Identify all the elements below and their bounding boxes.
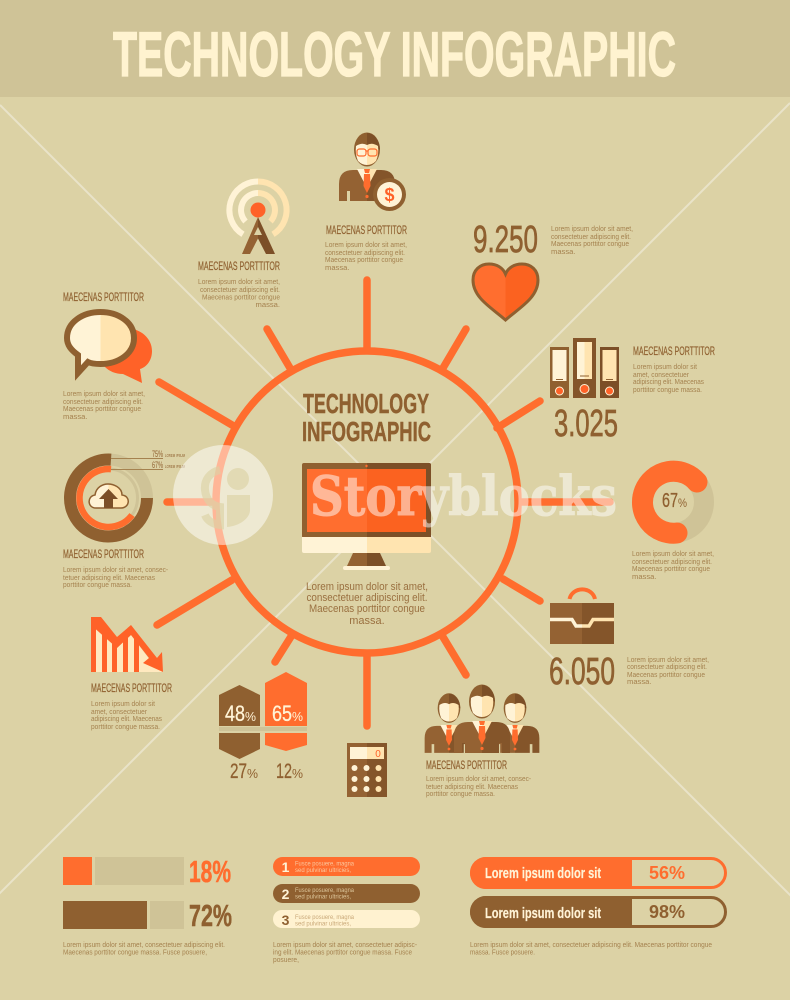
stat: 9.250: 9.250 <box>473 219 538 261</box>
hexagon comparison chart: % <box>245 709 256 724</box>
cloud <box>89 484 128 508</box>
bottom panel: numbered pills: sed pulvinar ultricies, <box>295 894 351 900</box>
binders caption: porttitor congue massa. <box>633 385 702 394</box>
diagonal background lines <box>0 103 790 900</box>
stat text: consectetuer adipiscing elit. <box>551 232 631 241</box>
stat text <box>551 224 633 256</box>
bars caption <box>63 940 225 956</box>
donut chart: 67% <box>642 471 704 533</box>
hexagon comparison chart: 48 <box>225 701 245 726</box>
central heading <box>302 388 431 447</box>
progress pills caption: massa. Fusce posuere. <box>470 948 535 956</box>
progress labels: LOREM IPSUM <box>165 464 185 469</box>
hexagon comparison chart: % <box>247 766 258 781</box>
glasses <box>357 149 377 156</box>
falling chart caption: adipiscing elit. Maecenas <box>91 714 162 723</box>
briefcase caption <box>627 655 709 686</box>
icon: calculator <box>347 743 387 797</box>
antenna caption: Lorem ipsum dolor sit amet, <box>198 277 280 286</box>
businessman caption: Lorem ipsum dolor sit amet, <box>325 240 407 249</box>
team caption: porttitor congue massa. <box>426 789 495 798</box>
stat text: Maecenas porttitor congue <box>551 239 629 248</box>
progress labels: 67% <box>152 460 163 470</box>
central heading: INFOGRAPHIC <box>302 416 431 447</box>
businessman caption <box>325 225 407 272</box>
central text block: Lorem ipsum dolor sit amet, <box>306 581 428 593</box>
bottom panel: progress pills: 56% <box>649 863 685 883</box>
businessman caption: Maecenas porttitor congue <box>325 255 403 264</box>
icon: briefcase <box>550 589 614 644</box>
central ring with spokes <box>157 280 610 726</box>
speech caption <box>63 389 145 421</box>
icon: speech bubbles <box>67 312 152 383</box>
stat text: massa. <box>551 247 575 256</box>
falling chart caption: amet, consectetuer <box>91 707 147 716</box>
binders caption: Lorem ipsum dolor sit <box>633 362 698 371</box>
progress labels: LOREM IPSUM <box>165 453 185 458</box>
bottom panel: numbered pills: Fusce posuere, magna <box>295 860 354 868</box>
falling chart caption <box>91 683 172 731</box>
radial progress caption <box>63 549 168 589</box>
icon: heart <box>473 264 538 320</box>
stat text: Lorem ipsum dolor sit amet, <box>551 224 633 233</box>
bottom panel: numbered pills: 1 <box>282 859 290 875</box>
radial progress with cloud upload <box>70 449 185 537</box>
central text block: consectetuer adipiscing elit. <box>306 592 428 604</box>
binders caption: MAECENAS PORTTITOR <box>633 346 715 358</box>
central text block: massa. <box>349 615 385 627</box>
pills caption: Lorem ipsum dolor sit amet, consectetuer adipisc- <box>273 940 417 949</box>
radial progress caption: Lorem ipsum dolor sit amet, consec- <box>63 565 168 574</box>
donut caption: massa. <box>632 572 656 581</box>
donut caption: Lorem ipsum dolor sit amet, <box>632 549 714 558</box>
binders caption: amet, consectetuer <box>633 370 689 379</box>
central text block <box>306 581 428 627</box>
progress labels <box>152 449 185 470</box>
antenna caption: consectetuer adipiscing elit. <box>200 285 280 294</box>
team caption: MAECENAS PORTTITOR <box>426 760 507 772</box>
bottom panel: numbered pills: Fusce posuere, magna <box>295 914 354 921</box>
icon: falling bar chart <box>91 617 163 672</box>
donut caption: Maecenas porttitor congue <box>632 564 710 573</box>
pills caption: ing elit. Maecenas porttitor congue massa. Fusce <box>273 948 412 956</box>
watermark: Storyblocks <box>310 464 617 528</box>
falling chart caption: porttitor congue massa. <box>91 722 160 731</box>
speech caption: consectetuer adipiscing elit. <box>63 397 143 406</box>
antenna caption: Maecenas porttitor congue <box>202 292 280 302</box>
bottom panel: numbered pills: 3 <box>282 912 290 928</box>
central heading: TECHNOLOGY <box>303 388 429 419</box>
binders caption <box>633 346 715 394</box>
hexagon comparison chart: 27 <box>230 760 247 783</box>
falling chart caption: MAECENAS PORTTITOR <box>91 683 172 695</box>
bottom panel: percentage bars: 18% <box>189 854 231 889</box>
coin: $ <box>384 185 395 205</box>
falling chart caption: Lorem ipsum dolor sit <box>91 699 156 708</box>
businessman caption: MAECENAS PORTTITOR <box>326 225 407 237</box>
icon: team of three <box>425 684 539 753</box>
speech caption: Maecenas porttitor congue <box>63 404 141 413</box>
bottom panel: numbered pills: sed pulvinar ultricies, <box>295 920 351 928</box>
bottom panel: numbered pills: 2 <box>282 886 290 902</box>
antenna caption: massa. <box>256 300 280 309</box>
bottom panel: progress pills <box>470 857 726 956</box>
bottom panel: numbered pills <box>273 857 420 964</box>
progress pills caption <box>470 940 712 956</box>
hexagon comparison chart: % <box>292 766 303 781</box>
bottom panel: numbered pills: sed pulvinar ultricies, <box>295 867 351 874</box>
icon: calculator: 0 <box>375 749 381 760</box>
donut caption <box>632 549 714 581</box>
radial progress caption: porttitor congue massa. <box>63 580 132 589</box>
speech caption: massa. <box>63 412 87 421</box>
bottom panel: percentage bars: 72% <box>189 898 232 933</box>
bottom panel: progress pills: 98% <box>649 902 685 922</box>
businessman caption: consectetuer adipiscing elit. <box>325 248 405 257</box>
bars caption: Maecenas porttitor congue massa. Fusce posuere, <box>63 948 207 956</box>
progress labels: 75% <box>152 449 163 459</box>
briefcase caption: massa. <box>627 677 651 686</box>
hexagon comparison chart: % <box>292 709 303 724</box>
pills caption <box>273 940 417 964</box>
donut chart: 67%: % <box>678 496 687 510</box>
bottom panel: progress pills: Lorem ipsum dolor sit <box>485 905 601 922</box>
antenna caption: MAECENAS PORTTITOR <box>198 261 280 273</box>
team caption: Lorem ipsum dolor sit amet, consec- <box>426 774 531 783</box>
hexagon comparison chart <box>219 672 307 783</box>
progress pills caption: Lorem ipsum dolor sit amet, consectetuer adipiscing elit. Maecenas porttitor congue <box>470 940 712 949</box>
speech caption heading: MAECENAS PORTTITOR <box>63 292 144 304</box>
stat: 6.050: 6.050 <box>549 651 615 693</box>
bottom panel: progress pills: Lorem ipsum dolor sit <box>485 865 601 882</box>
hexagon comparison chart: 12 <box>276 760 292 783</box>
radial progress caption: MAECENAS PORTTITOR <box>63 549 144 561</box>
briefcase caption: consectetuer adipiscing elit. <box>627 662 707 671</box>
donut caption: consectetuer adipiscing elit. <box>632 557 712 566</box>
briefcase caption: Maecenas porttitor congue <box>627 670 705 679</box>
icon: antenna <box>229 181 287 254</box>
hexagon comparison chart: 65 <box>272 701 292 726</box>
speech caption: Lorem ipsum dolor sit amet, <box>63 389 145 398</box>
radial progress caption: tetuer adipiscing elit. Maecenas <box>63 573 155 582</box>
binders caption: adipiscing elit. Maecenas <box>633 377 704 386</box>
bottom panel: numbered pills: Fusce posuere, magna <box>295 887 354 894</box>
businessman caption: massa. <box>325 263 349 272</box>
icon: businessman with coin <box>339 132 406 211</box>
icon: monitor <box>302 463 431 570</box>
central text block: Maecenas porttitor congue <box>309 603 425 615</box>
pills caption: posuere, <box>273 955 299 964</box>
bottom panel: percentage bars <box>63 854 232 956</box>
watermark <box>173 445 617 545</box>
antenna caption <box>198 261 280 309</box>
stat: 3.025: 3.025 <box>554 403 618 445</box>
team caption: tetuer adipiscing elit. Maecenas <box>426 782 518 791</box>
header band <box>0 0 790 97</box>
team caption <box>426 760 531 798</box>
donut chart: 67%: 67 <box>662 490 678 512</box>
briefcase caption: Lorem ipsum dolor sit amet, <box>627 655 709 664</box>
icon: binders <box>550 338 619 398</box>
bars caption: Lorem ipsum dolor sit amet, consectetuer adipiscing elit. <box>63 940 225 949</box>
